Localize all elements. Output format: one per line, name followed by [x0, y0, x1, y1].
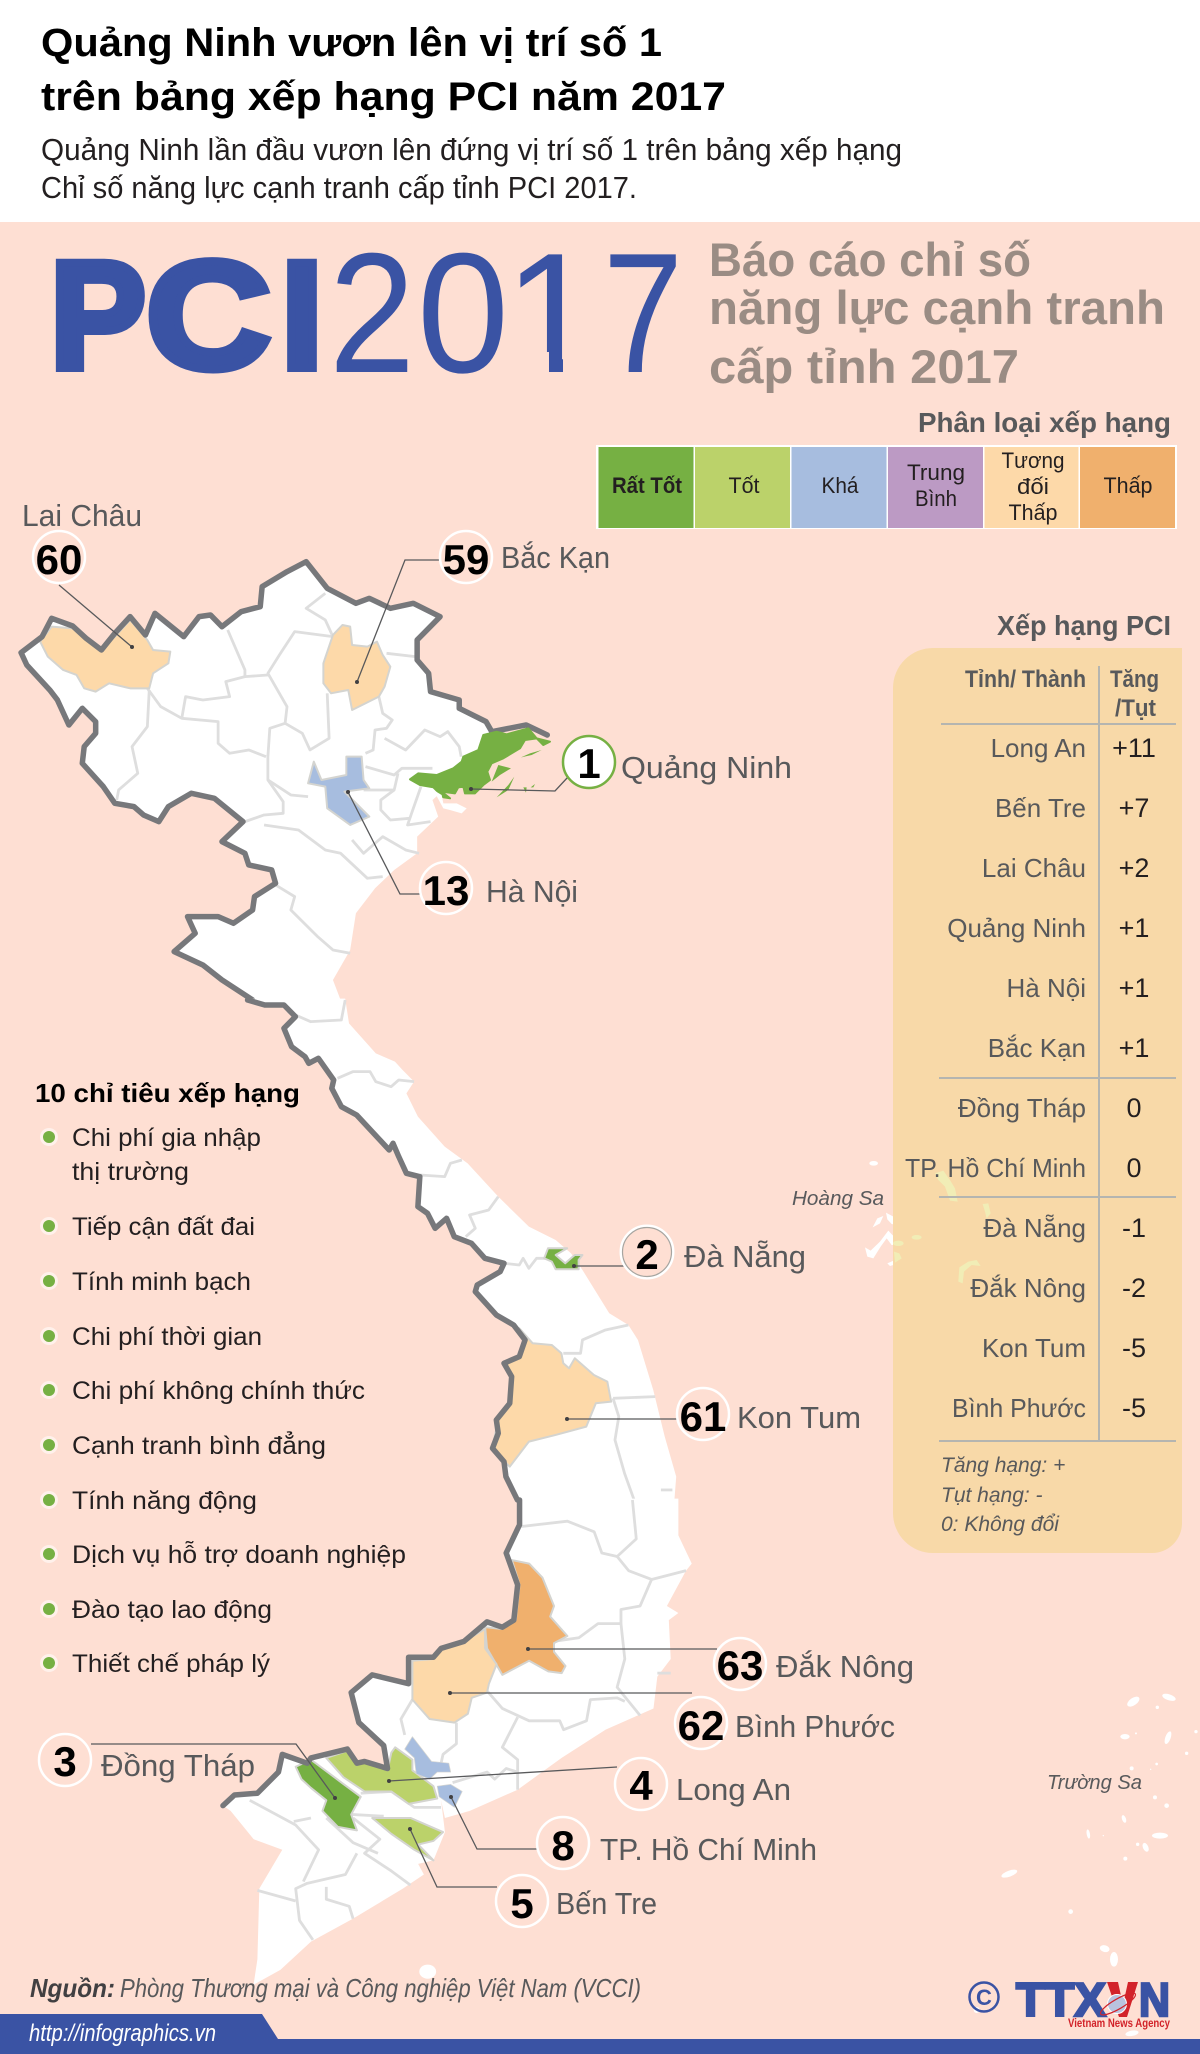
title	[41, 21, 726, 119]
islands: Trường Sa: Trường Sa	[1047, 1772, 1142, 1794]
PCI2017 logotype: I	[281, 230, 323, 401]
table heading: Xếp hạng PCI	[997, 610, 1171, 641]
callout: rank 4 Long An: 4	[629, 1762, 653, 1809]
callout: rank 62 Bình Phước	[448, 1691, 895, 1749]
criteria heading: 10 chỉ tiêu xếp hạng	[35, 1078, 300, 1108]
subtitle text: Quảng Ninh lần đầu vươn lên đứng vị trí số 1 trên bảng xếp hạng	[41, 132, 902, 167]
map: southern region	[223, 1499, 692, 1985]
callout: rank 60 Lai Châu: Lai Châu	[22, 498, 142, 533]
callout: rank 2 Đà Nẵng: 2	[635, 1231, 659, 1278]
callout: rank 1 Quảng Ninh	[469, 736, 792, 791]
province: Đà Nẵng	[544, 1248, 582, 1269]
province: Đắk Nông	[485, 1560, 567, 1675]
panel: PCI rank change table: TP. Hồ Chí Minh	[905, 1153, 1086, 1183]
PCI2017 logotype	[50, 218, 683, 409]
callout: rank 1 Quảng Ninh: Quảng Ninh	[621, 750, 792, 785]
panel: PCI rank change table: -1	[1122, 1213, 1146, 1243]
panel: PCI rank change table: /Tụt	[1115, 695, 1156, 722]
legend: ranking classification: Rất Tốt	[612, 473, 683, 498]
legend: ranking classification	[596, 407, 1177, 529]
islands: Trường Sa	[974, 1692, 1198, 2037]
PCI2017 logotype: 1	[504, 218, 599, 409]
national border: south	[223, 1500, 520, 1806]
callout: rank 5 Bến Tre	[408, 1827, 657, 1927]
panel: PCI rank change table: Bến Tre	[995, 793, 1086, 823]
title: trên bảng xếp hạng PCI năm 2017	[41, 75, 726, 119]
legend: ranking classification: Trung	[907, 460, 965, 485]
callout: rank 1 Quảng Ninh: 1	[577, 740, 601, 787]
callout: rank 63 Đắk Nông	[526, 1638, 914, 1690]
PCI2017 logotype: 0	[417, 218, 509, 409]
panel: PCI rank change table: Đồng Tháp	[958, 1093, 1086, 1123]
panel: PCI rank change table: Kon Tum	[982, 1333, 1086, 1363]
province: Lai Châu	[40, 620, 170, 692]
panel: PCI rank change table: +2	[1119, 853, 1149, 883]
panel: PCI rank change table: Bắc Kạn	[988, 1033, 1086, 1063]
panel: PCI rank change table: Đắk Nông	[970, 1273, 1086, 1303]
callout: rank 59 Bắc Kạn: Bắc Kạn	[501, 540, 610, 575]
PCI2017 logotype: 7	[603, 218, 683, 409]
PCI2017 logotype: C	[146, 230, 271, 401]
province: Kon Tum	[493, 1328, 611, 1467]
callout: rank 13 Hà Nội: 13	[423, 867, 469, 914]
panel: PCI rank change table: 0	[1126, 1093, 1142, 1123]
province: Bến Tre	[372, 1818, 443, 1860]
callout: rank 4 Long An: Long An	[676, 1772, 791, 1807]
panel: 10 ranking criteria: Tính năng động	[72, 1487, 257, 1515]
callout: rank 63 Đắk Nông: Đắk Nông	[776, 1649, 914, 1684]
panel: 10 ranking criteria	[35, 1078, 406, 1678]
footer bar with website	[0, 2014, 1200, 2054]
title: Quảng Ninh vươn lên vị trí số 1	[41, 21, 662, 65]
panel: PCI rank change table: +1	[1119, 1033, 1149, 1063]
table note: Tăng hạng: +	[941, 1454, 1065, 1477]
report heading: cấp tỉnh 2017	[709, 340, 1019, 393]
legend: ranking classification: Tốt	[728, 473, 760, 498]
legend: ranking classification: Khá	[822, 473, 859, 498]
callout: rank 5 Bến Tre: Bến Tre	[556, 1886, 657, 1921]
legend heading: Phân loại xếp hạng	[918, 407, 1171, 438]
table note	[941, 1454, 1065, 1536]
subtitle text	[41, 132, 902, 205]
footer bar with website: http://infographics.vn	[29, 2020, 216, 2047]
callout: rank 5 Bến Tre: 5	[510, 1880, 534, 1927]
callout: rank 13 Hà Nội	[346, 790, 578, 914]
table note: Tụt hạng: -	[941, 1484, 1043, 1507]
legend: ranking classification: Thấp	[1008, 500, 1058, 525]
map of Vietnam	[21, 562, 692, 1985]
map: central region	[248, 999, 676, 1501]
panel: PCI rank change table: Hà Nội	[1007, 973, 1086, 1003]
logo: TTXVN Vietnam News Agency	[970, 1973, 1170, 2030]
callout: rank 13 Hà Nội: Hà Nội	[486, 874, 578, 909]
logo: TTXVN Vietnam News Agency: Vietnam News Agency	[1068, 2016, 1170, 2030]
callout: rank 61 Kon Tum: 61	[680, 1393, 726, 1440]
panel: PCI rank change table: Bình Phước	[952, 1393, 1086, 1423]
callout: rank 59 Bắc Kạn: 59	[443, 536, 489, 583]
province: Bắc Kạn	[323, 625, 390, 710]
callout: rank 2 Đà Nẵng	[572, 1226, 806, 1278]
callout: rank 61 Kon Tum	[565, 1388, 861, 1440]
callout: rank 4 Long An	[387, 1758, 791, 1810]
panel: PCI rank change table: Lai Châu	[982, 853, 1086, 883]
report heading: Báo cáo chỉ số	[709, 233, 1031, 286]
legend: ranking classification: Tương	[1002, 448, 1064, 473]
panel: 10 ranking criteria: Chi phí không chính thức	[72, 1377, 365, 1405]
panel: PCI rank change table: Tỉnh/ Thành	[965, 666, 1086, 693]
panel: PCI rank change table	[893, 648, 1182, 1553]
report heading	[709, 233, 1165, 393]
panel: PCI rank change table: +7	[1119, 793, 1149, 823]
callout: rank 3 Đồng Tháp: 3	[53, 1738, 77, 1785]
province: Quảng Ninh	[410, 728, 550, 813]
PCI2017 logotype: P	[50, 230, 146, 401]
panel: PCI rank change table: +1	[1119, 913, 1149, 943]
legend: ranking classification: đối	[1017, 474, 1049, 499]
province: Đồng Tháp	[296, 1760, 361, 1830]
panel: 10 ranking criteria: Thiết chế pháp lý	[72, 1650, 271, 1678]
panel: 10 ranking criteria: Chi phí thời gian	[72, 1323, 262, 1351]
legend: ranking classification: Thấp	[1104, 473, 1152, 498]
panel: PCI rank change table: +1	[1119, 973, 1149, 1003]
islands: Hoàng Sa over table panel	[893, 1171, 991, 1283]
panel: 10 ranking criteria: Tiếp cận đất đai	[72, 1213, 255, 1241]
panel: PCI rank change table: -2	[1122, 1273, 1146, 1303]
callout: rank 3 Đồng Tháp	[39, 1734, 337, 1800]
PCI2017 logotype: 2	[329, 218, 415, 409]
islands: Hoàng Sa: Hoàng Sa	[792, 1188, 884, 1210]
callout: rank 2 Đà Nẵng: Đà Nẵng	[684, 1239, 806, 1274]
province: Bình Phước	[412, 1629, 497, 1723]
panel: 10 ranking criteria: thị trường	[72, 1158, 189, 1186]
callout: rank 60 Lai Châu	[22, 498, 142, 649]
panel: PCI rank change table: +11	[1112, 733, 1156, 763]
islands: Hoàng Sa	[792, 1161, 897, 1266]
national border: central	[248, 1000, 525, 1500]
callout: rank 8 TP. Hồ Chí Minh	[449, 1795, 817, 1869]
panel: PCI rank change table: -5	[1122, 1393, 1146, 1423]
callout: rank 62 Bình Phước: Bình Phước	[735, 1709, 895, 1744]
national border: north	[21, 562, 547, 1000]
panel: 10 ranking criteria: Tính minh bạch	[72, 1268, 251, 1296]
panel: 10 ranking criteria: Chi phí gia nhập	[72, 1124, 261, 1152]
province: Hà Nội	[308, 757, 369, 825]
panel: PCI rank change table: Quảng Ninh	[947, 913, 1086, 943]
legend: ranking classification: Bình	[915, 486, 957, 511]
callout: rank 59 Bắc Kạn	[355, 531, 610, 684]
logo: TTXVN Vietnam News Agency: TTX	[1016, 1973, 1106, 2026]
map: northern region	[21, 562, 547, 1000]
logo: TTXVN Vietnam News Agency: N	[1139, 1973, 1170, 2026]
callout: rank 61 Kon Tum: Kon Tum	[737, 1400, 861, 1435]
province: TP. Hồ Chí Minh	[405, 1737, 462, 1807]
panel: PCI rank change table: Đà Nẵng	[983, 1213, 1086, 1243]
logo: TTXVN Vietnam News Agency: C	[976, 1985, 992, 2010]
callout: rank 60 Lai Châu: 60	[36, 536, 82, 583]
panel: PCI rank change table: 0	[1126, 1153, 1142, 1183]
source note: Phòng Thương mại và Công nghiệp Việt Nam (VCCI)	[120, 1973, 641, 2003]
panel: PCI rank change table: Long An	[991, 733, 1086, 763]
callout: rank 8 TP. Hồ Chí Minh: TP. Hồ Chí Minh	[600, 1832, 817, 1867]
panel: PCI rank change table: -5	[1122, 1333, 1146, 1363]
source note: Nguồn:	[30, 1973, 115, 2003]
callout: rank 3 Đồng Tháp: Đồng Tháp	[101, 1748, 255, 1783]
panel: 10 ranking criteria: Dịch vụ hỗ trợ doanh nghiệp	[72, 1540, 406, 1569]
callout: rank 8 TP. Hồ Chí Minh: 8	[551, 1822, 575, 1869]
panel: 10 ranking criteria: Cạnh tranh bình đẳng	[72, 1430, 326, 1460]
panel: PCI rank change table: Tăng	[1110, 666, 1159, 693]
province: Long An	[326, 1747, 437, 1804]
subtitle text: Chỉ số năng lực cạnh tranh cấp tỉnh PCI 2017.	[41, 170, 637, 205]
panel: 10 ranking criteria: Đào tạo lao động	[72, 1596, 272, 1624]
table note: 0: Không đổi	[941, 1513, 1060, 1536]
report heading: năng lực cạnh tranh	[709, 281, 1165, 334]
callout: rank 62 Bình Phước: 62	[678, 1702, 724, 1749]
callout: rank 63 Đắk Nông: 63	[717, 1642, 763, 1689]
